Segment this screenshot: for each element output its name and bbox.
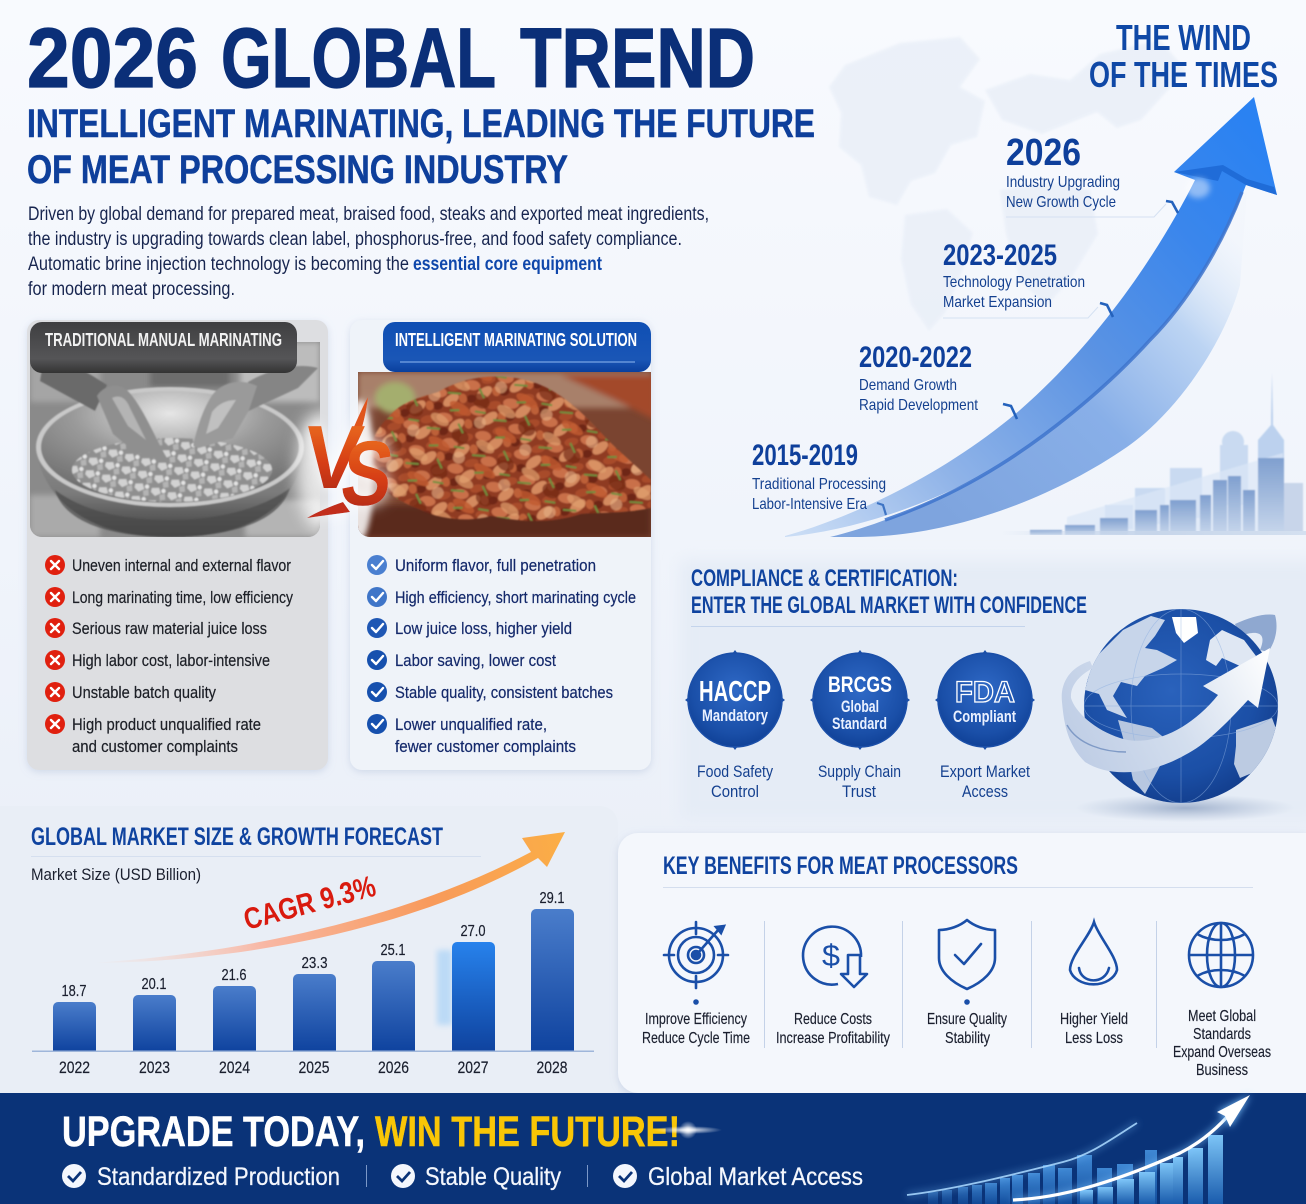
footer banner — [0, 1093, 1306, 1204]
milestone: 2026: Industry Upgrading — [1006, 174, 1120, 191]
milestone: 2023-2025: Technology Penetration — [943, 274, 1085, 291]
footer growth chart — [907, 1095, 1250, 1204]
footer headline — [62, 1108, 680, 1156]
footer benefit items: Standardized Production — [97, 1163, 340, 1191]
upward timeline arrow — [785, 97, 1277, 537]
title: TREND — [520, 11, 755, 105]
heading: compliance and certification — [691, 565, 1087, 619]
bar chart: 2026 — [378, 1058, 409, 1077]
milestone: 2020-2022 — [859, 341, 1017, 419]
text: reduce costs: Reduce Costs — [794, 1011, 872, 1028]
bar chart: 23.3 — [302, 955, 328, 972]
milestone: 2015-2019: Traditional Processing — [752, 476, 886, 493]
background world map — [829, 37, 1186, 331]
text: ensure quality: Stability — [945, 1030, 990, 1047]
VS emblem — [299, 397, 400, 525]
caption: supply chain trust — [818, 762, 901, 801]
header: intelligent: INTELLIGENT MARINATING SOLUTION — [395, 330, 637, 350]
caption: export market access — [940, 762, 1030, 801]
badge: FDA: Compliant — [953, 707, 1016, 726]
list: intelligent benefits: Labor saving, lower cost — [395, 651, 556, 670]
photo: hands in steel bowl — [30, 342, 348, 537]
text: reduce costs — [776, 1011, 890, 1047]
list: traditional drawbacks: and customer complaints — [72, 737, 238, 756]
list: traditional drawbacks: Uneven internal and external flavor — [72, 556, 291, 575]
list: intelligent benefits: Lower unqualified rate, — [395, 715, 547, 734]
bar chart: 2024 — [219, 1058, 250, 1077]
heading: compliance and certification: ENTER THE GLOBAL MARKET WITH CONFIDENCE — [691, 592, 1087, 619]
intro paragraph: for modern meat processing. — [28, 279, 235, 300]
header: traditional — [30, 322, 297, 373]
milestone: 2015-2019: 2015-2019 — [752, 439, 858, 472]
header: intelligent — [383, 322, 651, 372]
globe with arrow ribbon — [1062, 609, 1295, 822]
list: traditional drawbacks: High product unqualified rate — [72, 715, 261, 734]
text: meet global standards: Meet Global — [1188, 1008, 1256, 1025]
badge: HACCP — [685, 650, 785, 750]
text: higher yield: Higher Yield — [1060, 1011, 1128, 1028]
title — [27, 11, 755, 105]
text: improve efficiency: Reduce Cycle Time — [642, 1030, 750, 1047]
title: GLOBAL — [221, 11, 496, 105]
footer benefit items: Global Market Access — [648, 1163, 863, 1191]
VS emblem: V — [299, 407, 367, 508]
caption: supply chain trust: Supply Chain — [818, 762, 901, 781]
bar chart — [32, 890, 594, 1077]
list: traditional drawbacks — [45, 555, 293, 756]
footer benefit items: Stable Quality — [425, 1163, 561, 1191]
heading: compliance and certification: COMPLIANCE & CERTIFICATION: — [691, 565, 958, 592]
bar chart: 27.0 — [460, 923, 486, 940]
badge: FDA — [935, 650, 1035, 750]
subtitle: INTELLIGENT MARINATING, LEADING THE FUTURE — [27, 102, 815, 146]
header: traditional: TRADITIONAL MANUAL MARINATING — [45, 330, 282, 350]
caption: food safety control: Food Safety — [697, 762, 773, 781]
badge: BRCGS: BRCGS — [828, 672, 892, 697]
intro paragraph — [28, 204, 709, 300]
intro paragraph: essential core equipment — [413, 254, 603, 275]
badge: HACCP: Mandatory — [702, 706, 768, 725]
bar chart: 25.1 — [380, 942, 406, 959]
caption: export market access: Access — [962, 782, 1008, 801]
caption: food safety control: Control — [711, 782, 759, 801]
heading: market size: GLOBAL MARKET SIZE & GROWTH FORECAST — [31, 823, 443, 851]
text: ensure quality — [927, 1011, 1007, 1047]
VS emblem: S — [335, 421, 400, 525]
bar chart: 2027 — [458, 1058, 488, 1077]
city skyline — [1028, 380, 1306, 535]
caption: supply chain trust: Trust — [842, 782, 876, 801]
subtitle: OF MEAT PROCESSING INDUSTRY — [27, 148, 568, 192]
bar chart: 2022 — [59, 1058, 90, 1077]
intro paragraph: Automatic brine injection technology is becoming the — [28, 254, 409, 275]
caption: food safety control — [697, 762, 773, 801]
list: intelligent benefits — [367, 555, 636, 756]
caption: export market access: Export Market — [940, 762, 1030, 781]
icon: shield — [939, 920, 995, 1004]
axis label: Market Size (USD Billion) — [31, 865, 201, 884]
milestone: 2020-2022: 2020-2022 — [859, 341, 972, 374]
panel: intelligent marinating solution — [346, 320, 655, 770]
footer headline: WIN THE FUTURE! — [375, 1108, 680, 1156]
milestone: 2020-2022: Demand Growth — [859, 377, 957, 394]
footer headline: UPGRADE TODAY, — [62, 1108, 365, 1156]
text: ensure quality: Ensure Quality — [927, 1011, 1007, 1028]
heading: the wind of the times — [1089, 17, 1278, 95]
icon: water drop — [1070, 922, 1117, 984]
badge: BRCGS: Standard — [832, 714, 887, 733]
bar chart: 18.7 — [62, 983, 87, 1000]
bar chart: 2025 — [298, 1058, 330, 1077]
milestone: 2026 — [1006, 132, 1178, 217]
list: traditional drawbacks: Serious raw material juice loss — [72, 619, 267, 638]
list: intelligent benefits: Low juice loss, higher yield — [395, 619, 572, 638]
milestone: 2023-2025: Market Expansion — [943, 294, 1052, 311]
bar chart: 29.1 — [540, 890, 565, 907]
text: reduce costs: Increase Profitability — [776, 1030, 890, 1047]
heading: the wind of the times: THE WIND — [1116, 17, 1251, 58]
badge: BRCGS — [810, 650, 910, 750]
title: 2026 — [27, 11, 198, 105]
bar chart: 2028 — [536, 1058, 568, 1077]
milestone: 2020-2022: Rapid Development — [859, 397, 978, 414]
CAGR arrow — [90, 832, 565, 963]
icon: dollar with down arrow — [803, 927, 867, 987]
heading: key benefits: KEY BENEFITS FOR MEAT PROCESSORS — [663, 852, 1018, 880]
badge: HACCP: HACCP — [699, 676, 771, 708]
list: intelligent benefits: fewer customer complaints — [395, 737, 576, 756]
badge: FDA: FDA — [955, 676, 1015, 709]
milestone: 2026: 2026 — [1006, 132, 1081, 174]
icon: target — [664, 922, 728, 1004]
photo: marinated meat — [346, 372, 655, 540]
milestone: 2023-2025 — [943, 239, 1113, 318]
list: traditional drawbacks: High labor cost, labor-intensive — [72, 651, 270, 670]
text: meet global standards — [1173, 1008, 1271, 1079]
text: improve efficiency — [642, 1011, 750, 1047]
CAGR label: CAGR 9.3% — [240, 870, 379, 937]
list: intelligent benefits: High efficiency, short marinating cycle — [395, 588, 636, 607]
badge: BRCGS: Global — [841, 697, 879, 716]
text: higher yield — [1060, 1011, 1128, 1047]
subtitle — [27, 102, 815, 192]
text: meet global standards: Standards — [1193, 1026, 1251, 1043]
list: intelligent benefits: Stable quality, consistent batches — [395, 683, 613, 702]
panel: traditional manual marinating — [27, 320, 348, 770]
bar chart: 2023 — [139, 1058, 170, 1077]
milestone: 2023-2025: 2023-2025 — [943, 239, 1057, 272]
text: higher yield: Less Loss — [1065, 1030, 1123, 1047]
bar chart: 21.6 — [222, 967, 247, 984]
intro paragraph: Driven by global demand for prepared meat, braised food, steaks and exported meat ingredients, — [28, 204, 709, 225]
milestone: 2026: New Growth Cycle — [1006, 194, 1116, 211]
panel: key benefits — [618, 833, 1306, 1093]
text: improve efficiency: Improve Efficiency — [645, 1011, 747, 1028]
footer benefit items — [62, 1163, 863, 1191]
list: traditional drawbacks: Long marinating time, low efficiency — [72, 588, 293, 607]
intro paragraph: the industry is upgrading towards clean label, phosphorus-free, and food safety compliance. — [28, 229, 682, 250]
panel: market size and growth forecast — [0, 806, 618, 1093]
icon: globe grid — [1189, 923, 1253, 987]
text: meet global standards: Expand Overseas — [1173, 1044, 1271, 1061]
bar chart: 20.1 — [142, 976, 167, 993]
list: traditional drawbacks: Unstable batch quality — [72, 683, 216, 702]
list: intelligent benefits: Uniform flavor, full penetration — [395, 556, 596, 575]
icon: dollar with down arrow: $ — [822, 938, 840, 973]
milestone: 2015-2019 — [752, 439, 886, 515]
milestone: 2015-2019: Labor-Intensive Era — [752, 496, 867, 513]
text: meet global standards: Business — [1196, 1062, 1248, 1079]
